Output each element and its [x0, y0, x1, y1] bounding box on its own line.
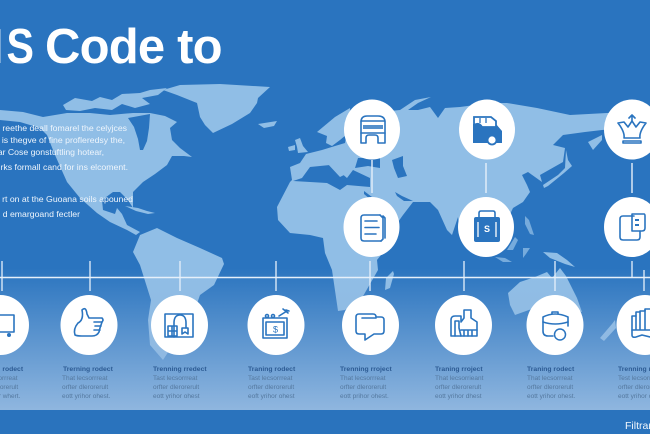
caption 1 — [0, 366, 24, 400]
caption 2: eott yrihor ohest. — [62, 393, 111, 400]
caption 4: Traning rodect — [248, 366, 296, 373]
caption 7: That lecsorrreat — [527, 375, 573, 382]
caption 3: orfter dlerorerult — [153, 384, 199, 391]
caption 6: eott yrihor dhest — [435, 393, 482, 400]
icon: crown — [604, 100, 650, 160]
caption 5: orfter dlerorerult — [340, 384, 386, 391]
icon: briefcase: S — [484, 224, 490, 234]
australia — [508, 268, 582, 315]
caption 5: Trenning rroject — [340, 366, 392, 373]
icon: copies — [604, 197, 650, 257]
novaya zemlya — [400, 97, 431, 110]
caption 6: orfter dlerorerult — [435, 384, 481, 391]
intro text: is thegve of fine profleredsy the, — [2, 135, 125, 145]
intro text: rt on at the Guoana soils apouned — [2, 194, 133, 204]
kamchatka — [588, 135, 602, 150]
caption 4 — [248, 366, 296, 400]
caption 2: orfter dlerorerult — [62, 384, 108, 391]
icon: folder with wheel — [459, 100, 515, 160]
mediterranean — [293, 165, 370, 190]
south america — [133, 228, 224, 360]
caption 4: eoft yrihor ohest — [248, 393, 295, 400]
footer band — [0, 410, 650, 434]
intro text: d emargoand fectler — [3, 209, 80, 219]
caption 7: Traning rodect — [527, 366, 575, 373]
title: Code to — [45, 20, 222, 74]
inland seas — [128, 114, 413, 201]
caption 4: Tast lecsorrreat — [248, 375, 293, 382]
hudson bay — [128, 114, 150, 150]
north america — [0, 110, 192, 235]
bottom fade panel — [0, 268, 650, 410]
caption 5: eott prihor ohest. — [340, 393, 389, 400]
greenland — [163, 84, 270, 133]
caption 3 — [153, 366, 207, 400]
world map — [0, 84, 650, 360]
japan — [543, 150, 572, 188]
intro text — [0, 123, 133, 219]
icon: document — [344, 197, 400, 257]
title: S — [6, 19, 34, 74]
bottom row: icon monitor — [0, 295, 29, 355]
caption 7 — [527, 366, 576, 400]
icon: pot — [526, 295, 584, 355]
caption 7: eott yrihor ohest. — [527, 393, 576, 400]
madagascar — [385, 271, 394, 290]
icon: briefcase — [458, 197, 514, 257]
caption 5 — [340, 366, 392, 400]
icon: calendar with plane — [248, 295, 304, 355]
icon: bus — [344, 100, 400, 160]
timeline — [0, 160, 650, 291]
caption 2 — [62, 366, 114, 400]
icon: chat — [342, 295, 399, 355]
iceland — [258, 121, 277, 128]
icon: fist — [616, 295, 650, 355]
caspian sea — [392, 156, 407, 178]
icon: map and lock — [151, 295, 208, 355]
uk — [295, 138, 308, 153]
caption 8 — [618, 366, 650, 400]
icon: hand — [435, 295, 492, 355]
caption 6: That lecsorrieant — [435, 375, 484, 382]
scandinavia — [317, 108, 352, 146]
caption 4: orfter dlerorerult — [248, 384, 294, 391]
new zealand — [600, 320, 616, 341]
italy — [326, 162, 344, 177]
persian gulf — [395, 192, 413, 201]
icon: thumbs up — [60, 295, 118, 355]
eurasia and africa — [277, 103, 650, 311]
black sea — [355, 158, 380, 168]
caption 3: Trenning rredect — [153, 366, 207, 373]
icon: calendar with plane: $ — [273, 324, 278, 334]
intro text: ar Cose gonstuftling hotear, — [0, 147, 104, 157]
caption 6: Traning rroject — [435, 366, 483, 373]
caption 2: That lecsorrreat — [62, 375, 108, 382]
caption 5: That lecsorrreat — [340, 375, 386, 382]
caption 2: Trerning rodect — [63, 366, 114, 373]
caption 7: orfter dlerorerult — [527, 384, 573, 391]
caption 3: eott yrihor ohest — [153, 393, 200, 400]
intro text: rks formall cand for ins elcoment. — [1, 162, 128, 172]
caption 6 — [435, 366, 484, 400]
arctic islands — [63, 88, 167, 111]
intro text: reethe deall fomarel the celyjces — [2, 123, 128, 133]
red sea — [364, 191, 372, 200]
southeast asia islands — [495, 216, 534, 262]
caption 3: Tast lecsorrreat — [153, 375, 198, 382]
new guinea — [543, 252, 575, 267]
ireland — [288, 145, 295, 151]
cuba and hispaniola — [125, 206, 155, 214]
